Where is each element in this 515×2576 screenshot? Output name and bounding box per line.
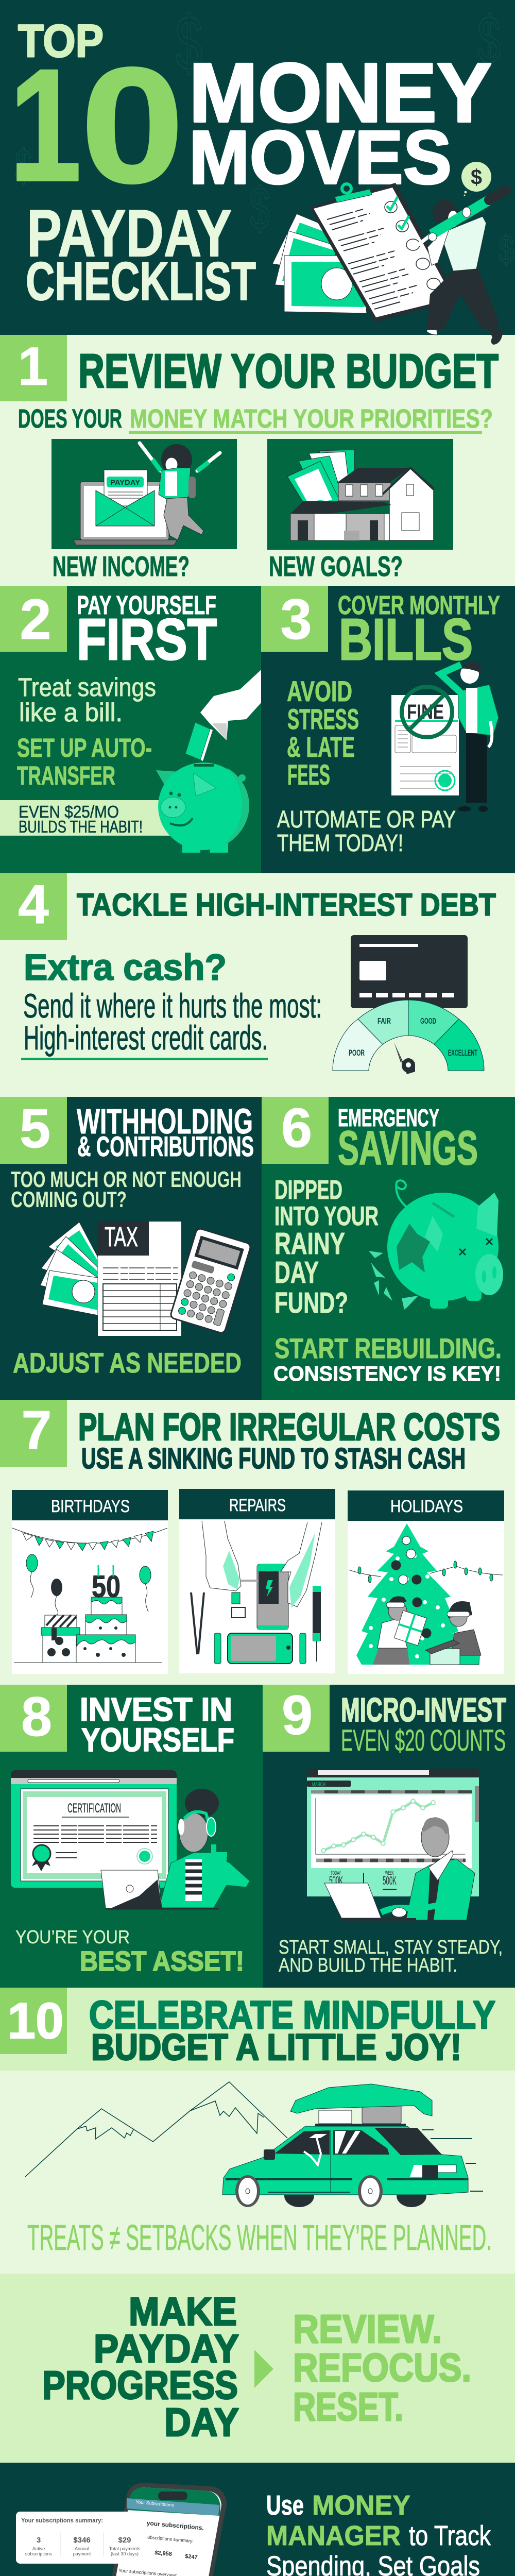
heading: invest in yourself: INVEST IN (80, 1691, 232, 1728)
card: subscriptions summary: Total payments (109, 2546, 141, 2551)
icon: person's shoes over step 1 edge (427, 330, 503, 345)
chart: credit score gauge: GOOD (420, 1017, 436, 1026)
panel: new goals illustration (267, 439, 453, 550)
card: subscriptions summary (16, 2512, 147, 2564)
panel: make payday progress day (0, 2274, 515, 2463)
card: holidays (348, 1490, 504, 1674)
title: moves: MOVES (189, 115, 452, 200)
icon: phone with app: Subscriptions summary: (144, 2534, 194, 2544)
text: dipped into your rainy day fund: FUND? (274, 1286, 348, 1319)
number badge 5: 5 (20, 1097, 50, 1159)
panel: money manager app (0, 2463, 515, 2576)
text: avoid stress and late fees: AVOID (287, 675, 352, 707)
panel: step 5 withholding and contributions (0, 1097, 262, 1400)
text: avoid stress and late fees (287, 675, 359, 791)
chart: stock dashboard window: WEEK (385, 1870, 394, 1876)
card: subscriptions summary: Your subscriptions summary: (21, 2518, 103, 2524)
text: set up auto-transfer (17, 733, 152, 790)
heading: contributions: & CONTRIBUTIONS (77, 1130, 254, 1162)
panel: step 4 tackle high-interest debt (0, 873, 515, 1097)
icon: worried man (440, 662, 499, 812)
icon: dollar coin (461, 162, 491, 196)
icon: fine notice (391, 687, 459, 795)
number badge 7: 7 (22, 1400, 52, 1461)
card: subscriptions summary: Annual (75, 2546, 89, 2551)
icon: phone with app: $2,958 (154, 2550, 172, 2557)
icon: clipboard checklist (309, 183, 458, 323)
heading: pay yourself: PAY YOURSELF (77, 590, 216, 620)
panel: step 10 celebrate mindfully (0, 1988, 515, 2274)
icon: christmas tree (349, 1523, 503, 1665)
text: dipped into your rainy day fund: DAY (274, 1256, 319, 1290)
heading: invest in yourself: YOURSELF (81, 1721, 234, 1758)
panel: step 6 emergency savings (262, 1096, 515, 1400)
panel: new income illustration (52, 439, 237, 549)
card: holidays: HOLIDAYS (390, 1497, 463, 1516)
icon: woman with laptop (101, 1789, 250, 1909)
icon: green car with canoe (222, 2084, 483, 2207)
text: too much or not enough: TOO MUCH OR NOT ENOUGH (11, 1167, 242, 1192)
text: too much or not enough: COMING OUT? (11, 1187, 127, 1212)
panel: hero header: $ (176, 0, 202, 86)
heading: make payday progress day: MAKE (129, 2290, 237, 2334)
title: checklist: CHECKLIST (26, 251, 256, 312)
card: birthdays (12, 1490, 168, 1674)
icon: certification window (11, 1770, 177, 1888)
icon: piggy bank with hand (156, 670, 261, 853)
chart: stock dashboard window: 500K (383, 1874, 397, 1887)
text: consistency is key: CONSISTENCY IS KEY! (273, 1362, 501, 1385)
text: automate or pay them today: THEM TODAY! (277, 829, 403, 856)
card: birthdays: BIRTHDAYS (51, 1497, 130, 1516)
panel: new income illustration: PAYDAY (110, 478, 141, 486)
heading: first: FIRST (77, 607, 217, 672)
heading: make payday progress day: PROGRESS (42, 2363, 238, 2408)
card: repairs (179, 1489, 335, 1673)
icon: certification window: CERTIFICATION (67, 1801, 121, 1816)
icon: mountains (25, 2082, 287, 2177)
text: treat savings like a bill (18, 673, 156, 727)
text: too much or not enough (11, 1167, 242, 1212)
icon: man with laptop (324, 1818, 475, 1921)
text: treat savings like a bill: Treat savings (18, 673, 156, 702)
chart: stock dashboard window (307, 1769, 479, 1896)
chart: credit score gauge (333, 1000, 484, 1074)
card: subscriptions summary: $29 (118, 2536, 131, 2545)
panel: hero header: $ (15, 140, 32, 191)
card: subscriptions summary: (last 30 days) (111, 2551, 139, 2556)
label: new goals: NEW GOALS? (269, 550, 403, 582)
text: avoid stress and late fees: STRESS (287, 703, 359, 735)
icon: birthday cake: 50 (92, 1569, 121, 1604)
heading: withholding: WITHHOLDING (77, 1101, 253, 1141)
panel: hero header (0, 0, 515, 335)
icon: phone repair with hands (191, 1521, 322, 1664)
icon: fine notice: FINE (407, 701, 444, 723)
panel: step 1 review your budget (0, 335, 515, 586)
text: review refocus reset: REVIEW. (293, 2307, 442, 2351)
number badge 8 (0, 1685, 67, 1752)
text: set up auto-transfer: TRANSFER (17, 761, 115, 790)
card: subscriptions summary: subscriptions (25, 2551, 53, 2556)
text: automate or pay them today (277, 806, 456, 856)
heading: budget a little joy: BUDGET A LITTLE JOY! (91, 2027, 461, 2068)
card: subscriptions summary: Active (32, 2546, 45, 2551)
text: review refocus reset: RESET. (293, 2385, 403, 2429)
number badge 6: 6 (281, 1096, 312, 1159)
icon: bunting (12, 1528, 167, 1551)
text: high-interest credit cards (21, 1019, 268, 1060)
text: send it where it hurts the most: Send it where it hurts the most: (23, 987, 322, 1025)
title: number ten (9, 34, 184, 217)
text: best asset: BEST ASSET! (80, 1946, 244, 1977)
heading: make payday progress day: PAYDAY (94, 2327, 239, 2371)
icon: person with giant pencil (416, 190, 506, 330)
text: set up auto-transfer: SET UP AUTO- (17, 733, 152, 762)
number badge 5 (0, 1097, 67, 1164)
chart: credit score gauge: FAIR (377, 1017, 391, 1026)
card: subscriptions summary: 3 (37, 2536, 41, 2545)
title: payday: PAYDAY (27, 196, 232, 270)
chart: credit score gauge: EXCELLENT (448, 1048, 477, 1058)
icon: phone with app: Your Subscriptions (135, 2499, 175, 2508)
text: avoid stress and late fees: & LATE (287, 731, 355, 763)
icon: gifts (41, 1615, 80, 1663)
icon: phone with app (94, 2483, 227, 2576)
number badge 2 (0, 586, 67, 652)
arrow (254, 2350, 273, 2388)
icon: credit card (351, 935, 468, 1008)
card: subscriptions summary: payment (73, 2551, 91, 2556)
text: avoid stress and late fees: FEES (287, 758, 330, 791)
text: start small stay steady (279, 1937, 503, 1976)
panel: step 3 cover monthly bills (261, 586, 515, 873)
number badge 4 (0, 873, 67, 940)
heading: bills: BILLS (339, 607, 473, 672)
panel: hero header: $ (478, 2, 501, 77)
text: extra cash: Extra cash? (24, 947, 227, 988)
icon: tax form (98, 1222, 181, 1336)
panel: step 8 invest in yourself (0, 1685, 263, 1988)
callout: even $25/mo: EVEN $25/MO (19, 802, 119, 821)
number badge 6 (262, 1096, 329, 1164)
text: treat savings like a bill: like a bill. (19, 698, 123, 727)
card: repairs: REPAIRS (229, 1496, 286, 1515)
number badge 1 (0, 335, 67, 401)
callout: even $25/mo (0, 800, 180, 836)
icon: phone with app: $247 (185, 2553, 198, 2561)
chart: stock dashboard window: TODAY (331, 1870, 341, 1876)
text: use money manager: MONEY (312, 2490, 410, 2521)
icon: calculator (170, 1228, 251, 1334)
text: use money manager: to Track (409, 2520, 491, 2551)
number badge 4: 4 (18, 873, 49, 935)
label: new income: NEW INCOME? (53, 550, 190, 582)
panel: step 7 plan for irregular costs (0, 1400, 515, 1685)
panel: hero header: $ (250, 176, 270, 242)
chart: stock dashboard window: MARCH (312, 1782, 325, 1788)
text: dipped into your rainy day fund: RAINY (274, 1227, 345, 1261)
icon: cash fan (40, 1222, 98, 1315)
callout: even $25/mo: BUILDS THE HABIT! (19, 817, 143, 836)
text: dipped into your rainy day fund: DIPPED (274, 1175, 342, 1205)
title: top: TOP (18, 15, 104, 66)
heading: make payday progress day: DAY (164, 2400, 239, 2445)
subheading: does your: DOES YOUR (18, 404, 122, 433)
number badge 9 (263, 1684, 330, 1752)
number badge 3: 3 (280, 588, 312, 651)
text: adjust as needed: ADJUST AS NEEDED (13, 1347, 242, 1379)
text: review refocus reset (293, 2307, 471, 2429)
text: automate or pay them today: AUTOMATE OR PAY (277, 806, 456, 833)
icon: birthday cake (14, 1565, 162, 1663)
text: use money manager (266, 2490, 491, 2576)
panel: step 2 pay yourself first (0, 586, 261, 873)
icon: broken piggy bank (369, 1180, 503, 1310)
text: start small stay steady: AND BUILD THE HABIT. (279, 1955, 457, 1976)
heading: emergency: EMERGENCY (338, 1105, 439, 1132)
text: high-interest credit cards: High-interest credit cards. (24, 1019, 268, 1057)
number badge 8: 8 (21, 1685, 52, 1748)
text: dipped into your rainy day fund: INTO YOUR (274, 1201, 379, 1231)
chart: stock dashboard window: 500K (329, 1874, 343, 1887)
icon: cash bills fan (272, 214, 367, 313)
icon: dollar coin: $ (471, 165, 482, 189)
number badge 7 (0, 1400, 67, 1467)
text: use money manager: MANAGER (266, 2520, 401, 2551)
number badge 2: 2 (20, 588, 52, 651)
text: review refocus reset: REFOCUS. (293, 2346, 471, 2390)
icon: tax form: TAX (105, 1222, 138, 1252)
icon: children with gifts (373, 1596, 481, 1665)
number badge 9: 9 (282, 1684, 313, 1746)
title: number ten: 1 (9, 36, 81, 214)
title: number ten: 0 (81, 34, 184, 217)
icon: phone with app: Track your subscriptions. (129, 2518, 204, 2532)
number badge 3 (261, 586, 328, 652)
text: you're your: YOU’RE YOUR (15, 1926, 130, 1947)
number badge 10: 10 (7, 1992, 64, 2049)
icon: jumping woman (140, 443, 220, 540)
icon: balloons (26, 1554, 151, 1615)
heading: make payday progress day (42, 2290, 239, 2445)
text: use money manager: Use (266, 2490, 304, 2521)
panel: step 9 micro-invest (263, 1684, 515, 1988)
text: dipped into your rainy day fund (274, 1175, 379, 1319)
number badge 1: 1 (18, 336, 48, 397)
heading: invest in yourself (80, 1691, 234, 1758)
card: subscriptions summary: $346 (73, 2536, 91, 2545)
title: money: MONEY (189, 45, 492, 140)
chart: credit score gauge: POOR (349, 1048, 365, 1058)
